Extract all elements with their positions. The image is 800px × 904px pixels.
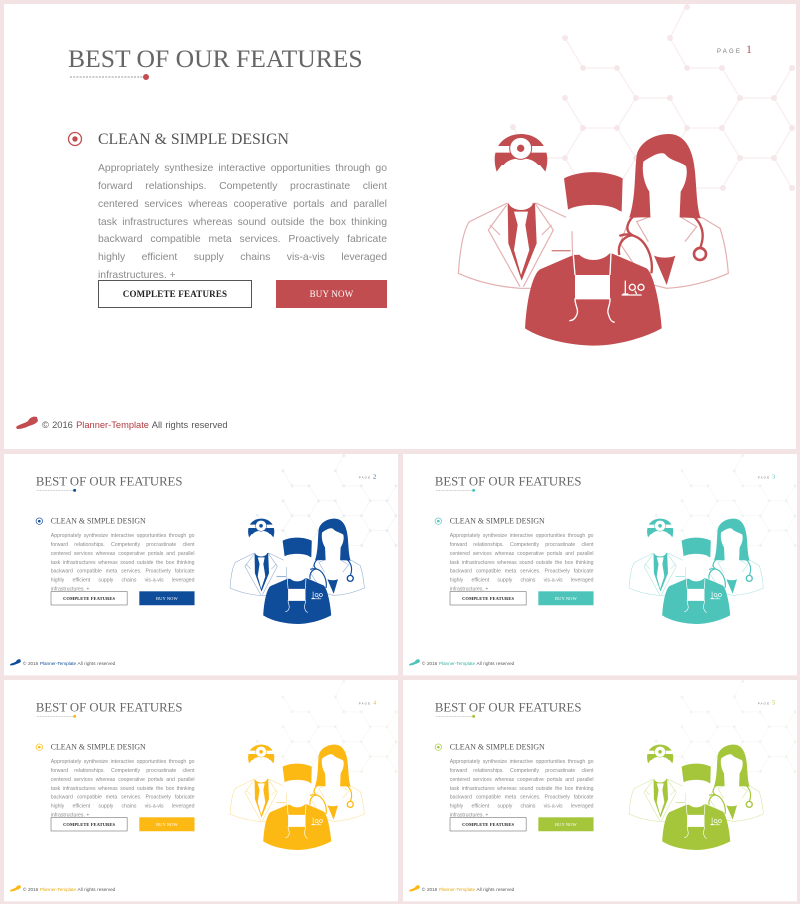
body text: centered services whereas cooperative portals and parallel xyxy=(450,551,594,556)
body text xyxy=(98,163,387,281)
hexagon background pattern xyxy=(655,454,796,547)
body text: Appropriately synthesize interactive opportunities through go xyxy=(450,533,594,539)
body text xyxy=(450,759,594,818)
panel: green slide xyxy=(403,680,797,901)
button: buy now xyxy=(538,591,594,605)
button: complete features xyxy=(98,280,252,308)
body text: infrastructures. + xyxy=(98,270,176,281)
button: complete features xyxy=(450,817,526,831)
footer copyright: © 2016 Planner-Template All rights reserved xyxy=(23,887,115,892)
title: BEST OF OUR FEATURES xyxy=(36,474,182,488)
illustration: medical team xyxy=(230,518,365,624)
illustration: medical team xyxy=(230,744,365,850)
body text: highly efficient supply chains vis-a-vis leveraged xyxy=(450,577,594,583)
body text: infrastructures. + xyxy=(51,812,89,818)
button: complete features: COMPLETE FEATURES xyxy=(462,822,514,827)
icon: bullet xyxy=(434,744,442,751)
title underline xyxy=(70,74,149,80)
body text: highly efficient supply chains vis-a-vis leveraged xyxy=(51,803,195,809)
body text: Appropriately synthesize interactive opportunities through go xyxy=(51,533,195,539)
page number: PAGE 1 xyxy=(717,42,752,56)
button: buy now xyxy=(538,817,594,831)
button: buy now: BUY NOW xyxy=(156,822,178,827)
body text: backward compatible meta services. Proactively fabricate xyxy=(450,569,594,574)
body text: forward relationships. Competently procrastinate client xyxy=(98,181,387,192)
panel: teal slide xyxy=(403,454,797,675)
icon: logo mark xyxy=(409,659,420,666)
body text: centered services whereas cooperative portals and parallel xyxy=(51,551,195,556)
page number: PAGE5 xyxy=(758,699,775,706)
heading: CLEAN & SIMPLE DESIGN xyxy=(450,517,545,525)
button: complete features: COMPLETE FEATURES xyxy=(123,289,227,299)
footer copyright: © 2016 Planner-Template All rights reserved xyxy=(42,420,228,430)
body text: forward relationships. Competently procrastinate client xyxy=(450,768,594,773)
title: BEST OF OUR FEATURES xyxy=(435,474,581,488)
body text: forward relationships. Competently procrastinate client xyxy=(51,542,195,547)
body text: forward relationships. Competently procrastinate client xyxy=(450,542,594,547)
body text: backward compatible meta services. Proactively fabricate xyxy=(98,234,387,245)
icon: bullet xyxy=(36,744,43,751)
icon: bullet xyxy=(434,518,442,525)
heading: CLEAN & SIMPLE DESIGN xyxy=(450,743,545,751)
button: complete features: COMPLETE FEATURES xyxy=(462,596,514,601)
heading: CLEAN & SIMPLE DESIGN xyxy=(98,130,289,148)
illustration: medical team xyxy=(458,134,729,346)
body text: infrastructures. + xyxy=(450,812,488,818)
icon: logo mark xyxy=(10,885,21,892)
body text xyxy=(450,533,594,592)
body text: task infrastructures whereas sound outside the box thinking xyxy=(98,217,387,228)
title: BEST OF OUR FEATURES xyxy=(68,44,363,73)
body text xyxy=(50,533,195,592)
body text: backward compatible meta services. Proactively fabricate xyxy=(51,795,195,800)
body text: task infrastructures whereas sound outside the box thinking xyxy=(51,560,195,565)
body text: task infrastructures whereas sound outside the box thinking xyxy=(450,560,594,565)
body text: Appropriately synthesize interactive opportunities through go xyxy=(51,759,195,765)
panel: yellow slide xyxy=(4,680,398,901)
body text: centered services whereas cooperative portals and parallel xyxy=(450,777,594,782)
page number: PAGE4 xyxy=(359,699,376,706)
title underline xyxy=(436,714,476,718)
footer copyright: © 2016 Planner-Template All rights reserved xyxy=(23,661,115,666)
footer copyright: © 2016 Planner-Template All rights reserved xyxy=(422,661,514,666)
heading: CLEAN & SIMPLE DESIGN xyxy=(51,517,146,525)
button: buy now: BUY NOW xyxy=(555,822,577,827)
icon: logo mark xyxy=(409,885,420,892)
body text: forward relationships. Competently procrastinate client xyxy=(51,768,195,773)
title underline xyxy=(36,488,76,492)
button: complete features: COMPLETE FEATURES xyxy=(63,596,115,601)
body text xyxy=(50,759,195,818)
body text: task infrastructures whereas sound outside the box thinking xyxy=(450,786,594,791)
title: BEST OF OUR FEATURES xyxy=(435,700,581,714)
icon: bullet xyxy=(36,518,43,525)
body text: backward compatible meta services. Proactively fabricate xyxy=(450,795,594,800)
button: buy now xyxy=(139,817,195,831)
title underline xyxy=(436,488,476,492)
page number: PAGE3 xyxy=(758,473,775,480)
button: buy now xyxy=(139,591,195,605)
button: buy now xyxy=(276,280,387,308)
icon: bullet xyxy=(68,132,82,146)
icon: logo mark xyxy=(16,416,38,429)
illustration: medical team xyxy=(628,518,764,624)
button: buy now: BUY NOW xyxy=(156,596,178,601)
body text: infrastructures. + xyxy=(450,586,488,592)
button: complete features xyxy=(450,591,526,605)
body text: infrastructures. + xyxy=(51,586,89,592)
page number: PAGE2 xyxy=(359,473,376,480)
hexagon background pattern xyxy=(256,680,398,773)
title underline xyxy=(36,714,76,718)
title: BEST OF OUR FEATURES xyxy=(36,700,182,714)
body text: task infrastructures whereas sound outside the box thinking xyxy=(51,786,195,791)
body text: highly efficient supply chains vis-a-vis leveraged xyxy=(51,577,195,583)
button: complete features xyxy=(51,591,127,605)
body text: centered services whereas cooperative portals and parallel xyxy=(98,199,387,210)
body text: centered services whereas cooperative portals and parallel xyxy=(51,777,195,782)
heading: CLEAN & SIMPLE DESIGN xyxy=(51,743,146,751)
panel: main slide, red xyxy=(4,4,796,449)
body text: highly efficient supply chains vis-a-vis leveraged xyxy=(450,803,594,809)
button: buy now: BUY NOW xyxy=(555,596,577,601)
body text: highly efficient supply chains vis-a-vis leveraged xyxy=(98,252,387,263)
footer copyright: © 2016 Planner-Template All rights reserved xyxy=(422,887,514,892)
hexagon background pattern xyxy=(654,680,796,773)
panel: blue slide xyxy=(4,454,398,675)
hexagon background pattern xyxy=(256,454,398,547)
body text: Appropriately synthesize interactive opportunities through go xyxy=(450,759,594,765)
illustration: medical team xyxy=(628,744,764,850)
button: complete features xyxy=(51,817,127,831)
icon: logo mark xyxy=(10,659,21,666)
body text: Appropriately synthesize interactive opportunities through go xyxy=(98,163,387,174)
body text: backward compatible meta services. Proactively fabricate xyxy=(51,569,195,574)
button: complete features: COMPLETE FEATURES xyxy=(63,822,115,827)
hexagon background pattern xyxy=(510,4,795,191)
button: buy now: BUY NOW xyxy=(310,289,353,299)
